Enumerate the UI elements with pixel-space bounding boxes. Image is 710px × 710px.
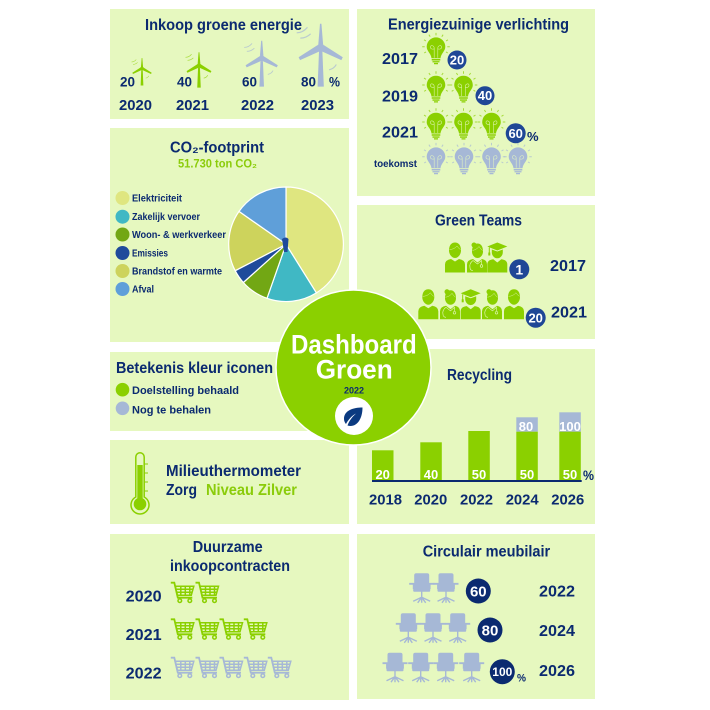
legend: Brandstof en warmte xyxy=(132,266,222,278)
bar chart xyxy=(372,412,582,482)
years: 2023 xyxy=(301,97,334,114)
carts: achieved xyxy=(171,583,267,639)
panel: recycling xyxy=(357,349,595,524)
icon: wind turbine 2023 xyxy=(297,24,343,87)
year labels: 2020 xyxy=(126,589,162,606)
legend xyxy=(116,191,226,296)
icon: wind turbine 2021 xyxy=(186,52,211,88)
year labels: 2024 xyxy=(539,623,575,640)
percent sign: % xyxy=(527,129,539,144)
heading: recycling: Recycling xyxy=(447,367,512,384)
badge 60 xyxy=(466,578,491,604)
year labels: 2017 xyxy=(382,51,418,68)
people row 2017 xyxy=(445,242,507,272)
panel: duurzame inkoopcontracten xyxy=(110,534,349,700)
heading: co2-footprint: CO₂-footprint xyxy=(170,140,265,157)
badge 60: 60 xyxy=(508,126,523,141)
legend: Zakelijk vervoer xyxy=(132,212,200,223)
pie chart xyxy=(229,187,343,302)
x-axis years: 2026 xyxy=(551,491,584,508)
percent sign: % xyxy=(517,673,526,685)
values: 40 xyxy=(177,74,192,90)
legend: Afval xyxy=(132,284,154,296)
badge 100 xyxy=(490,659,515,684)
values: 80 xyxy=(301,74,316,90)
year labels: 2026 xyxy=(539,663,575,680)
year labels: toekomst xyxy=(374,159,418,170)
panel: co2-footprint xyxy=(110,128,349,342)
year labels: 2022 xyxy=(539,584,575,601)
badge 20 xyxy=(448,50,466,70)
label: milieuthermometer: Milieuthermometer xyxy=(166,463,301,480)
icon: wind turbine 2022 xyxy=(244,41,278,87)
bar chart: 100 xyxy=(559,419,581,434)
x-axis years: 2024 xyxy=(506,491,539,508)
legend item: to be achieved: Nog te behalen xyxy=(132,404,211,416)
central badge: dashboard groen xyxy=(276,290,431,445)
badge 100: 100 xyxy=(492,665,513,679)
values xyxy=(120,74,340,90)
heading: circulair meubilair: Circulair meubilair xyxy=(423,544,550,561)
heading: duurzame inkoopcontracten: Duurzame xyxy=(193,539,263,556)
year labels: 2021 xyxy=(126,627,162,644)
year 2017: 2017 xyxy=(550,258,586,275)
legend: Emissies xyxy=(132,248,168,260)
heading: green teams: Green Teams xyxy=(435,213,522,230)
badge 20: 20 xyxy=(528,310,543,326)
x-axis years: 2022 xyxy=(460,491,493,508)
icon: thermometer xyxy=(131,453,149,514)
bar chart: 50 xyxy=(520,467,534,482)
x-axis years: 2018 xyxy=(369,491,402,508)
panel: milieuthermometer xyxy=(110,440,349,524)
bar chart: 50 xyxy=(472,467,486,482)
badge 40 xyxy=(476,86,494,105)
badge 60: 60 xyxy=(470,584,487,600)
year labels: 2022 xyxy=(126,665,162,682)
years: 2020 xyxy=(119,97,152,114)
x-axis years: 2020 xyxy=(414,491,447,508)
heading: betekenis kleur iconen: Betekenis kleur iconen xyxy=(116,360,273,377)
badge 20 xyxy=(526,308,546,328)
year labels xyxy=(374,51,418,170)
title: dashboard: Dashboard xyxy=(291,329,417,359)
chairs xyxy=(382,573,484,682)
legend: Elektriciteit xyxy=(132,194,183,204)
bar chart: 40 xyxy=(424,467,438,482)
years: 2021 xyxy=(176,97,209,114)
x-axis years xyxy=(369,491,584,508)
year labels: 2021 xyxy=(382,125,418,142)
icon: wind turbine 2020 xyxy=(132,58,152,86)
legend item: to be achieved xyxy=(116,402,211,416)
values: % xyxy=(329,74,340,90)
badge 80 xyxy=(478,618,502,642)
year: 2022 xyxy=(344,385,364,395)
year labels xyxy=(539,584,575,680)
legend item: achieved: Doelstelling behaald xyxy=(132,385,239,397)
year labels: 2019 xyxy=(382,88,418,106)
carts: future xyxy=(171,658,291,678)
panel: betekenis kleur iconen xyxy=(110,352,349,431)
badge 60 xyxy=(506,123,526,143)
icon: leaf xyxy=(335,397,373,435)
years: 2022 xyxy=(241,97,274,114)
badge 80: 80 xyxy=(482,622,498,640)
percent sign: % xyxy=(583,467,594,483)
people row 2021 xyxy=(418,289,524,319)
year 2021: 2021 xyxy=(551,304,587,321)
badge 1: 1 xyxy=(515,261,523,277)
bar chart: 80 xyxy=(519,419,533,434)
panel: green teams xyxy=(357,205,595,339)
heading: inkoop groene energie: Inkoop groene energie xyxy=(145,17,302,34)
bar chart: 20 xyxy=(375,467,390,482)
bar chart: 50 xyxy=(563,467,577,482)
panel: energiezuinige verlichting xyxy=(357,9,595,196)
bulbs: future xyxy=(422,143,532,174)
label: zorg: Zorg xyxy=(166,482,197,499)
badge 20: 20 xyxy=(450,52,464,68)
badge 1 xyxy=(509,259,529,279)
title: groen: Groen xyxy=(316,354,393,384)
heading: duurzame inkoopcontracten xyxy=(170,539,290,575)
years xyxy=(119,97,334,114)
heading: energiezuinige verlichting: Energiezuinige verlichting xyxy=(388,16,569,34)
panel: inkoop groene energie xyxy=(110,9,349,119)
label: niveau zilver: Niveau Zilver xyxy=(206,482,297,499)
subheading: total: 51.730 ton CO₂ xyxy=(178,159,257,171)
bulbs: achieved xyxy=(422,33,505,140)
badge 40: 40 xyxy=(478,88,492,103)
values: 20 xyxy=(120,74,135,90)
heading: duurzame inkoopcontracten: inkoopcontracten xyxy=(170,558,290,575)
year labels xyxy=(126,589,162,682)
values: 60 xyxy=(242,74,257,90)
panel: circulair meubilair xyxy=(357,534,595,699)
legend: Woon- & werkverkeer xyxy=(132,230,226,241)
